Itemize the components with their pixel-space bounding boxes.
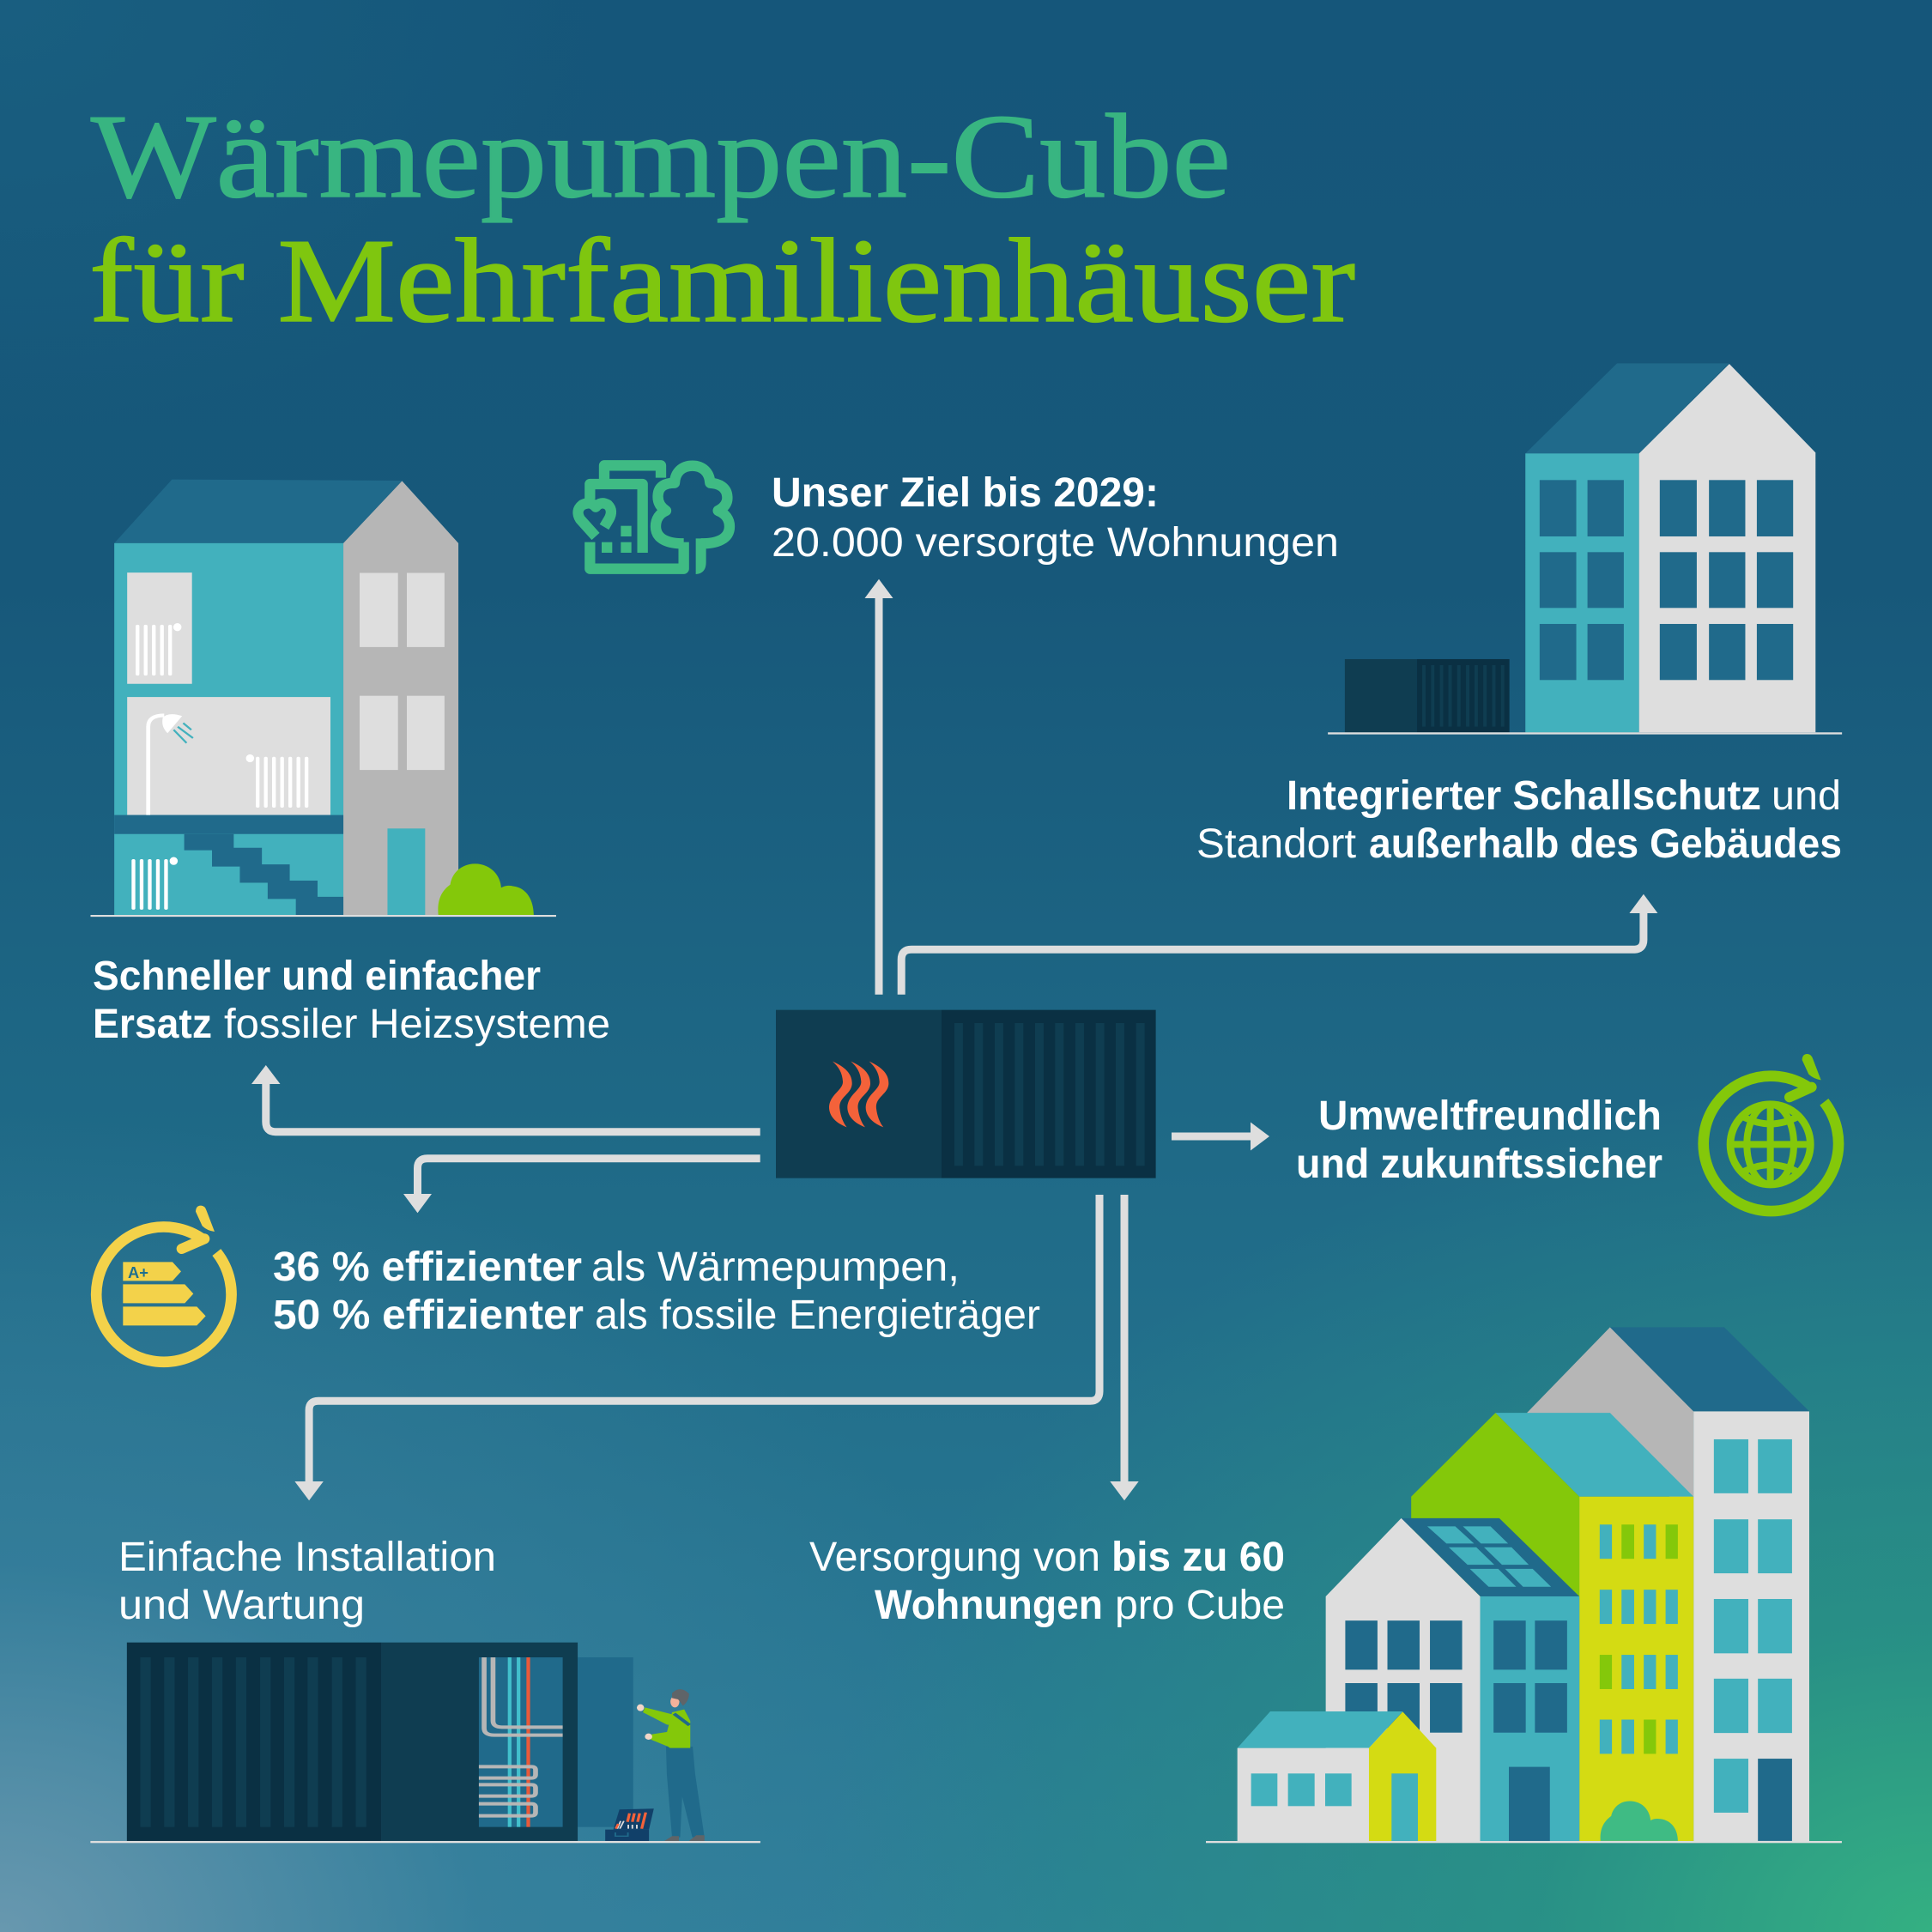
text: installation: und Wartung: [118, 1583, 365, 1628]
arrow: to environment: [1172, 1123, 1269, 1150]
illustration: small house in front: [1206, 1711, 1842, 1843]
arrow: to supply: [1110, 1195, 1139, 1500]
text: sound protection: [1196, 773, 1842, 867]
text: environmentally friendly: Umweltfreundlich: [1318, 1093, 1662, 1139]
text: target 2029: [772, 470, 1339, 566]
arrow: to efficiency: [403, 1159, 760, 1213]
text: sound protection: und: [1772, 773, 1841, 819]
text: fast replacement: [93, 954, 610, 1047]
toolbox: [605, 1808, 654, 1841]
arrow: to house with outdoor cube: [901, 894, 1657, 995]
illustration: house with outdoor cube: [1328, 363, 1842, 735]
service panel with pipes: [479, 1657, 633, 1827]
illustration: cube with open service door and worker: [90, 1643, 760, 1843]
central heat pump cube: [776, 1010, 1156, 1178]
arrow: up to target: [865, 579, 893, 995]
text: sound protection: Integrierter Schallschutz: [1287, 773, 1761, 819]
text: supply capacity: Wohnungen: [875, 1583, 1103, 1628]
title: [89, 90, 1355, 348]
text: target 2029: Unser Ziel bis 2029:: [772, 470, 1159, 516]
text: environmentally friendly: [1296, 1093, 1662, 1187]
text: fast replacement: Schneller und einfacher: [93, 954, 541, 999]
text: fast replacement: Ersatz: [93, 1002, 212, 1047]
text: fast replacement: fossiler Heizsysteme: [224, 1002, 610, 1047]
worker: [637, 1689, 705, 1841]
title: für Mehrfamilienhäuser: [89, 215, 1355, 348]
text: sound protection: außerhalb des Gebäudes: [1369, 821, 1842, 867]
text: supply capacity: Versorgung von: [809, 1535, 1100, 1580]
text: efficiency: als Wärmepumpen,: [591, 1245, 960, 1290]
icon: building and tree: [578, 465, 730, 574]
text: efficiency: 36 % effizienter: [273, 1245, 582, 1290]
icon: globe with cycle arrow: [1704, 1054, 1838, 1211]
text: supply capacity: bis zu 60: [1111, 1535, 1285, 1580]
text: supply capacity: [809, 1535, 1285, 1628]
title: Wärmepumpen-Cube: [91, 90, 1231, 223]
text: efficiency: [273, 1245, 1040, 1338]
illustration: neighbourhood of apartment buildings: [1326, 1327, 1809, 1841]
text: efficiency: 50 % effizienter: [273, 1293, 584, 1338]
text: environmentally friendly: und zukunftssicher: [1296, 1142, 1662, 1187]
text: installation: Einfache Installation: [118, 1535, 496, 1580]
text: efficiency: als fossile Energieträger: [595, 1293, 1040, 1338]
icon: energy label with cycle arrow: [96, 1206, 232, 1362]
text: sound protection: Standort: [1196, 821, 1356, 867]
arrow: to installation: [294, 1195, 1099, 1500]
icon: energy label with cycle arrow: A+: [128, 1263, 148, 1281]
text: installation: [118, 1535, 496, 1628]
arrow: to fossil replacement: [251, 1065, 760, 1132]
text: supply capacity: pro Cube: [1115, 1583, 1285, 1628]
illustration: house with radiators: [90, 480, 556, 917]
text: target 2029: 20.000 versorgte Wohnungen: [772, 520, 1339, 566]
